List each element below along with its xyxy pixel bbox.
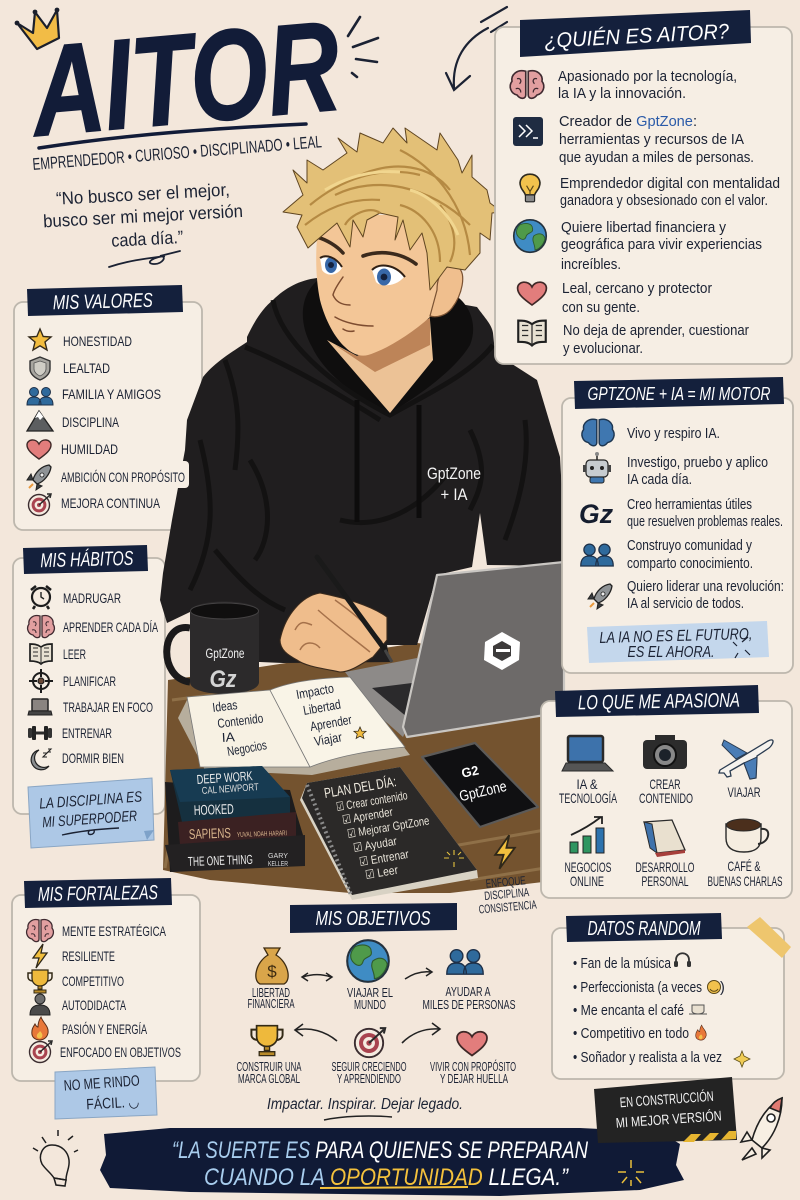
motor text 5: IA al servicio de todos.: [627, 596, 744, 612]
icon: idea bulb doodle: [33, 1130, 78, 1186]
phone: GptZone: [458, 778, 508, 805]
strength: competitivo: COMPETITIVO: [62, 973, 124, 989]
arrow: goal link 4: [402, 1023, 440, 1043]
open notebook: Libertad: [302, 697, 342, 718]
mug: GptZone: [206, 646, 244, 661]
sign: en construccion: [594, 1077, 737, 1143]
sticky note: superpoder: LA DISCIPLINA ES: [39, 788, 143, 813]
icon: rocket doodle: [741, 1098, 782, 1160]
open notebook: IA: [221, 729, 235, 745]
focus label: CONSISTENCIA: [478, 898, 537, 917]
motor text 3: [627, 497, 783, 530]
plan del dia notebook: [300, 767, 478, 900]
sticky note: no me rindo: NO ME RINDO: [63, 1072, 140, 1095]
book stack: [165, 766, 305, 872]
value: honestidad: HONESTIDAD: [63, 333, 132, 349]
motor text 4: Construyo comunidad y: [627, 538, 753, 554]
panel: lo que me apasiona: [541, 685, 792, 898]
item: negocios online: ONLINE: [570, 873, 604, 889]
bio text 2: que ayudan a miles de personas.: [559, 150, 754, 166]
bio text 2: [559, 114, 754, 166]
desk grain: [165, 690, 560, 880]
strength: competitivo: [28, 970, 124, 993]
icon: brain: [510, 71, 544, 98]
strength: autodidacta: [30, 994, 126, 1015]
habit: leer: LEER: [63, 646, 86, 662]
bio text 3: ganadora y obsesionado con el valor.: [560, 193, 768, 209]
value: mejora: [28, 494, 160, 516]
book stack: DEEP WORK: [196, 768, 253, 787]
eyes: [320, 257, 404, 285]
habit: entrenar: [28, 725, 112, 741]
heading: LO QUE ME APASIONA: [578, 690, 740, 714]
value: honestidad: [29, 329, 132, 350]
habit: madrugar: [31, 586, 121, 609]
panel: mis objetivos: [236, 903, 516, 1120]
habit: aprender: [28, 616, 158, 638]
habit: entrenar: ENTRENAR: [62, 725, 112, 741]
goal: dejar huella: [430, 1032, 516, 1086]
goal: libertad financiera: [248, 948, 295, 1011]
goal: libertad financiera: LIBERTAD: [252, 986, 290, 1000]
heading: DATOS RANDOM: [588, 918, 701, 940]
plan del dia notebook: ☑ Entrenar: [358, 847, 410, 869]
heading: [27, 285, 183, 316]
bio text 4: [561, 220, 762, 273]
banner line 1: “LA SUERTE ES PARA QUIENES SE PREPARAN: [172, 1137, 589, 1164]
icon: headphones: [674, 953, 691, 967]
open notebook: Viajar: [313, 729, 344, 749]
value: ambicion patch over hoodie: [27, 461, 189, 490]
bio text 4: Quiere libertad financiera y: [561, 220, 727, 236]
focus label: [478, 873, 537, 917]
focus label: ENFOQUE: [485, 873, 526, 891]
motor text 2: Investigo, pruebo y aplico: [627, 455, 768, 471]
icon: sparkles: [734, 1051, 750, 1067]
habit: trabajar: TRABAJAR EN FOCO: [63, 699, 153, 715]
icon: heart: [518, 282, 546, 305]
strength: resiliente: [33, 944, 115, 968]
hoodie text: + IA: [440, 485, 468, 504]
icon: rocket: [588, 584, 612, 609]
fact list: • Perfeccionista (a veces: [573, 980, 702, 996]
motto: Impactar. Inspirar. Dejar legado.: [267, 1096, 463, 1113]
fact list: • Me encanta el café: [573, 1003, 684, 1019]
writing hand and pen: [280, 557, 392, 672]
icon: Gz logo: Gz: [579, 499, 613, 529]
callout: ES EL AHORA.: [628, 644, 714, 661]
character illustration: [160, 128, 566, 900]
mug: [167, 602, 259, 694]
bio text 2: Creador de GptZone:: [559, 114, 697, 130]
panel: datos random: [552, 913, 791, 1079]
ear: [430, 266, 463, 317]
motor text 5: [627, 579, 784, 612]
sticky note: no me rindo: FÁCIL. ◡: [86, 1094, 140, 1113]
arrow to bio: [446, 7, 507, 90]
hood folds and shading: [190, 300, 526, 610]
sticky note: superpoder: [28, 778, 154, 848]
book stack: HOOKED: [194, 801, 234, 818]
neck shadow: [335, 318, 430, 372]
value: mejora: MEJORA CONTINUA: [61, 495, 160, 511]
heading: MIS FORTALEZAS: [38, 882, 159, 906]
icon: crown: [15, 8, 59, 49]
icon: terminal: [513, 117, 543, 146]
panel: quien es aitor: [495, 10, 792, 364]
bio text 4: geográfica para vivir experiencias: [561, 237, 762, 253]
habit: dormir: [31, 749, 124, 770]
fact list: [573, 956, 725, 1066]
tagline: EMPRENDEDOR • CURIOSO • DISCIPLINADO • LEAL: [32, 132, 322, 174]
item: ia y tecnologia: [559, 736, 617, 806]
item: cafe: [708, 819, 782, 889]
brows and mouth: [317, 237, 416, 264]
value: familia: FAMILIA Y AMIGOS: [62, 386, 161, 402]
fact list: • Fan de la música: [573, 956, 672, 972]
icon: lightning: [495, 835, 515, 869]
open notebook: [178, 677, 410, 775]
hair strands: [305, 150, 470, 262]
strength: enfocado: ENFOCADO EN OBJETIVOS: [60, 1044, 181, 1060]
icon: blue brain: [582, 419, 614, 446]
habit: leer: [30, 644, 86, 664]
fact list: • Soñador y realista a la vez: [573, 1050, 722, 1066]
heading: ¿QUIÉN ES AITOR?: [544, 20, 730, 53]
arrow: goal link 3: [295, 1024, 337, 1041]
hoodie text: GptZone: [427, 464, 481, 483]
heading: [555, 685, 759, 717]
sign: en construccion: EN CONSTRUCCIÓN: [619, 1088, 714, 1110]
title underline: [39, 124, 306, 148]
item: crear contenido: CREAR: [650, 776, 680, 792]
motor text 4: [627, 538, 753, 572]
open notebook: Contenido: [217, 710, 264, 731]
motor text 1: Vivo y respiro IA.: [627, 426, 720, 442]
personal quote: “No busco ser el mejor,: [55, 180, 230, 209]
motor text 4: comparto conocimiento.: [627, 556, 753, 572]
item: cafe: CAFÉ &: [728, 858, 761, 874]
hood opening: [303, 280, 473, 413]
fact list: • Competitivo en todo: [573, 1026, 689, 1042]
icon: coffee: [689, 1005, 707, 1014]
focus label: DISCIPLINA: [484, 885, 530, 903]
bio text 1: la IA y la innovación.: [558, 86, 686, 102]
item: ia y tecnologia: IA &: [576, 776, 598, 792]
strength: enfocado: [30, 1041, 181, 1062]
fact list: ): [720, 980, 725, 996]
laptop: [345, 562, 564, 737]
bio text 2: herramientas y recursos de IA: [559, 132, 744, 148]
neck: [327, 320, 433, 413]
bio text 3: Emprendedor digital con mentalidad: [560, 176, 780, 192]
goal: dejar huella: VIVIR CON PROPÓSITO: [430, 1059, 516, 1074]
goal: dejar huella: Y DEJAR HUELLA: [440, 1072, 508, 1086]
habit: planificar: [29, 669, 116, 693]
panel: mis habitos: [13, 545, 165, 848]
value: disciplina: DISCIPLINA: [62, 414, 119, 430]
bio text 5: [562, 281, 712, 316]
item: negocios online: [564, 817, 612, 889]
quote flourish: [109, 251, 180, 267]
mug: Gz: [210, 666, 236, 693]
item: ia y tecnologia: TECNOLOGÍA: [559, 790, 617, 806]
plan del dia notebook: ☑ Ayudar: [352, 834, 398, 855]
bio text 6: [563, 323, 749, 357]
book stack: THE ONE THING: [188, 852, 253, 869]
phone: G2: [460, 762, 480, 781]
strength: autodidacta: AUTODIDACTA: [62, 997, 126, 1013]
banner quote: [100, 1128, 684, 1196]
plan del dia notebook: ☑ Mejorar GptZone: [346, 813, 431, 841]
icon: lightbulb: [520, 174, 540, 202]
sticky note: superpoder: MI SUPERPODER: [42, 808, 138, 831]
face: [316, 215, 455, 356]
open notebook: Impacto: [295, 681, 335, 702]
bio text 4: increíbles.: [561, 257, 621, 273]
callout: LA IA NO ES EL FUTURO,: [599, 626, 753, 647]
hoodie text: [427, 464, 481, 504]
panel: mis fortalezas: [12, 878, 200, 1119]
plan del dia notebook: ☑ Leer: [364, 863, 399, 882]
icon: globe: [514, 220, 546, 252]
habit: madrugar: MADRUGAR: [63, 590, 121, 606]
heading: MIS OBJETIVOS: [316, 908, 431, 930]
hair: [283, 128, 502, 290]
goal: ayudar a miles: MILES DE PERSONAS: [422, 998, 516, 1012]
goal: viajar el mundo: [347, 940, 393, 1012]
goal: ayudar a miles: [422, 950, 516, 1012]
open notebook: Aprender: [309, 712, 353, 734]
strength: pasion: PASIÓN Y ENERGÍA: [62, 1021, 147, 1037]
value: lealtad: LEALTAD: [63, 360, 110, 376]
personal quote: cada día.”: [111, 227, 184, 251]
item: desarrollo personal: DESARROLLO: [636, 859, 695, 875]
bio text 5: con su gente.: [562, 300, 640, 316]
goal: marca global: [236, 1026, 302, 1086]
personal quote: [42, 179, 245, 254]
hoodie: [160, 278, 566, 663]
bio text 6: y evolucionar.: [563, 341, 643, 357]
bio text 1: Apasionado por la tecnología,: [558, 69, 737, 85]
goal: ayudar a miles: AYUDAR A: [446, 985, 491, 999]
value: disciplina: [27, 411, 119, 431]
value: lealtad: [30, 357, 110, 380]
strength: pasion: [32, 1017, 147, 1040]
arrow: goal link 2: [405, 968, 432, 979]
goal: viajar el mundo: VIAJAR EL: [347, 986, 393, 1000]
value: ambicion patch over hoodie: AMBICIÓN CON PROPÓSITO: [61, 469, 185, 485]
item: viajar: VIAJAR: [728, 784, 760, 800]
habit: aprender: APRENDER CADA DÍA: [63, 619, 158, 635]
sparks next to title: [348, 17, 378, 77]
motor text 3: Creo herramientas útiles: [627, 497, 752, 513]
motor text 2: IA cada día.: [627, 472, 692, 488]
motto underline: [324, 1116, 392, 1120]
desk: [163, 643, 560, 893]
goal: seguir creciendo: Y APRENDIENDO: [337, 1072, 401, 1086]
book stack: SAPIENS: [189, 825, 231, 842]
motor text 2: [627, 455, 768, 488]
value: humildad: [27, 440, 118, 459]
item: desarrollo personal: [636, 820, 695, 889]
tape: [747, 917, 791, 958]
icon: flame: [696, 1025, 706, 1040]
heading: [23, 545, 148, 574]
heading: [290, 903, 457, 933]
item: desarrollo personal: PERSONAL: [642, 873, 689, 889]
book stack: CAL NEWPORT: [201, 782, 259, 797]
book stack: GARY: [268, 853, 288, 860]
value: familia: [27, 386, 161, 405]
heading: [520, 10, 751, 57]
sticky note: no me rindo: [55, 1067, 157, 1119]
strength: resiliente: RESILIENTE: [62, 948, 115, 964]
habit: planificar: PLANIFICAR: [63, 673, 116, 689]
open notebook: Negocios: [226, 737, 268, 759]
hair highlight: [325, 172, 458, 235]
bio text 3: [560, 176, 780, 209]
value: humildad: HUMILDAD: [61, 441, 118, 457]
item: crear contenido: CONTENIDO: [639, 790, 693, 806]
goal: marca global: CONSTRUIR UNA: [236, 1060, 302, 1074]
item: crear contenido: [639, 735, 693, 806]
heading: [566, 913, 722, 942]
icon: robot: [583, 452, 611, 483]
open notebook: Ideas: [212, 697, 239, 715]
arrow: goal link 1: [302, 973, 332, 981]
callout: [587, 621, 769, 663]
goal: seguir creciendo: SEGUIR CRECIENDO: [332, 1060, 407, 1074]
habit: trabajar: [28, 699, 153, 715]
banner sparkle: [618, 1160, 644, 1186]
book stack: YUVAL NOAH HARARI: [237, 830, 287, 839]
goal: marca global: MARCA GLOBAL: [238, 1072, 300, 1086]
habit: dormir: DORMIR BIEN: [62, 750, 124, 766]
phone: [422, 743, 538, 827]
plan del dia notebook: PLAN DEL DÍA:: [323, 773, 397, 801]
icon: community: [581, 544, 613, 566]
plan del dia notebook: ☑ Aprender: [341, 805, 394, 827]
icon: wink face: [708, 980, 720, 994]
heading: MIS VALORES: [53, 290, 154, 314]
personal quote: busco ser mi mejor versión: [43, 201, 243, 231]
goal: libertad financiera: $: [267, 962, 277, 981]
bio text 5: Leal, cercano y protector: [562, 281, 712, 297]
plan del dia notebook: ☑ Crear contenido: [335, 788, 409, 814]
drawstrings: [357, 400, 419, 522]
item: negocios online: NEGOCIOS: [564, 859, 612, 875]
bio text 6: No deja de aprender, cuestionar: [563, 323, 749, 339]
heading: MIS HÁBITOS: [40, 547, 134, 572]
panel: mis valores: [14, 285, 202, 530]
goal: viajar el mundo: MUNDO: [354, 998, 386, 1012]
book stack: KELLER: [268, 861, 288, 868]
bio text 1: [558, 69, 737, 102]
heading: [24, 878, 172, 908]
keyword underline: [320, 1187, 468, 1188]
goal: seguir creciendo: [332, 1028, 407, 1086]
item: viajar: [719, 740, 773, 800]
panel: gptzone motor: [562, 377, 793, 673]
strength: mente: MENTE ESTRATÉGICA: [62, 923, 166, 939]
sign: en construccion: MI MEJOR VERSIÓN: [615, 1107, 722, 1131]
banner line 2: CUANDO LA OPORTUNIDAD LLEGA.”: [204, 1164, 569, 1191]
icon: open book: [518, 320, 546, 346]
heading: [574, 377, 784, 409]
strength: mente: [27, 920, 166, 942]
goal: libertad financiera: FINANCIERA: [248, 997, 295, 1011]
